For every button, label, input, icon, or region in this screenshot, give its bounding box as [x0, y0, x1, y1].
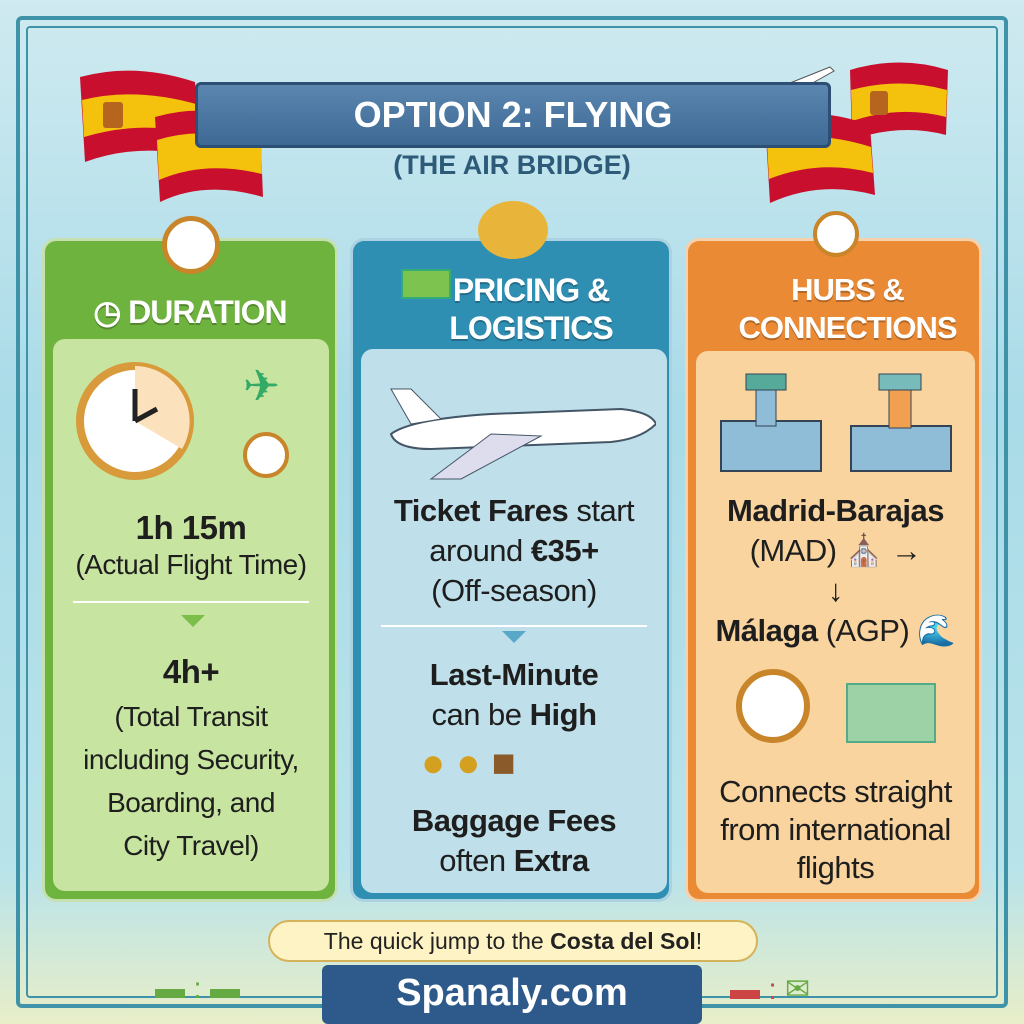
text: last-minute: can be High: [431, 697, 597, 732]
text: baggage: often Extra: [439, 843, 589, 878]
panel: duration: [42, 238, 338, 902]
text: madrid: Madrid-Barajas: [727, 493, 944, 528]
heading: duration: ◷ DURATION: [93, 294, 287, 330]
text: madrid: Málaga (AGP) 🌊: [715, 613, 956, 648]
icons: footer vehicles: ▬ : ▬: [155, 972, 240, 1005]
inner box: (Actual Flight Time): [75, 549, 307, 580]
icon: plane and stopwatch: ✈: [243, 362, 280, 411]
text: baggage: [412, 803, 616, 878]
text: madrid: ↓: [828, 573, 843, 608]
text: connects: Connects straight: [719, 774, 952, 809]
text: ▬ : ✉: [730, 973, 810, 1006]
callout: tagline: The quick jump to the Costa del Sol!: [324, 928, 702, 954]
icon: compass: [813, 211, 859, 257]
text: connects: flights: [797, 850, 874, 885]
heading: hubs: HUBS &: [791, 272, 904, 307]
text: total transit: 4h+: [163, 653, 219, 690]
heading: pricing: LOGISTICS: [449, 310, 613, 346]
callout: tagline: [268, 920, 758, 962]
text: fares: around €35+: [429, 533, 599, 568]
panel: hubs: [685, 238, 982, 902]
text: madrid: [715, 493, 956, 648]
icon: airplane: [390, 388, 656, 480]
icon: coins and bag: ● ● ■: [421, 741, 516, 785]
text: flight time: 1h 15m: [136, 509, 246, 546]
inner box: Boarding, and: [107, 787, 275, 818]
icon: stopwatch: [162, 216, 220, 274]
heading: hubs: [738, 272, 957, 345]
flag left: [80, 70, 263, 202]
icon: coins: [478, 201, 548, 259]
heading: pricing: PRICING &: [453, 272, 609, 308]
text: last-minute: [430, 657, 598, 732]
title ribbon: [195, 82, 831, 148]
title ribbon: OPTION 2: FLYING: [354, 94, 672, 135]
icon: plane and stopwatch: [243, 362, 289, 478]
inner box: [53, 339, 329, 891]
icon: compass and map: [736, 669, 936, 743]
text: fares: [394, 493, 634, 608]
text: connects: from international: [720, 812, 951, 847]
text: connects: [719, 774, 952, 885]
inner box: [696, 351, 975, 893]
inner box: City Travel): [123, 830, 259, 861]
heading: hubs: CONNECTIONS: [738, 310, 957, 345]
footer: brand: Spanaly.com: [396, 972, 628, 1014]
inner box: [361, 349, 667, 893]
panel: pricing: [350, 238, 672, 902]
footer: brand: [322, 965, 702, 1024]
flag right: [766, 62, 948, 203]
icon: clock: [76, 362, 194, 480]
inner box: (Total Transit: [114, 701, 268, 732]
text: madrid: (MAD) ⛪ →: [750, 533, 921, 568]
text: baggage: Baggage Fees: [412, 803, 616, 838]
icon: towers: [720, 374, 952, 472]
inner box: including Security,: [83, 744, 299, 775]
text: fares: (Off-season): [431, 573, 597, 608]
heading: pricing: [449, 272, 613, 346]
text: last-minute: Last-Minute: [430, 657, 598, 692]
text: fares: Ticket Fares start: [394, 493, 634, 528]
subtitle: (THE AIR BRIDGE): [393, 150, 631, 180]
